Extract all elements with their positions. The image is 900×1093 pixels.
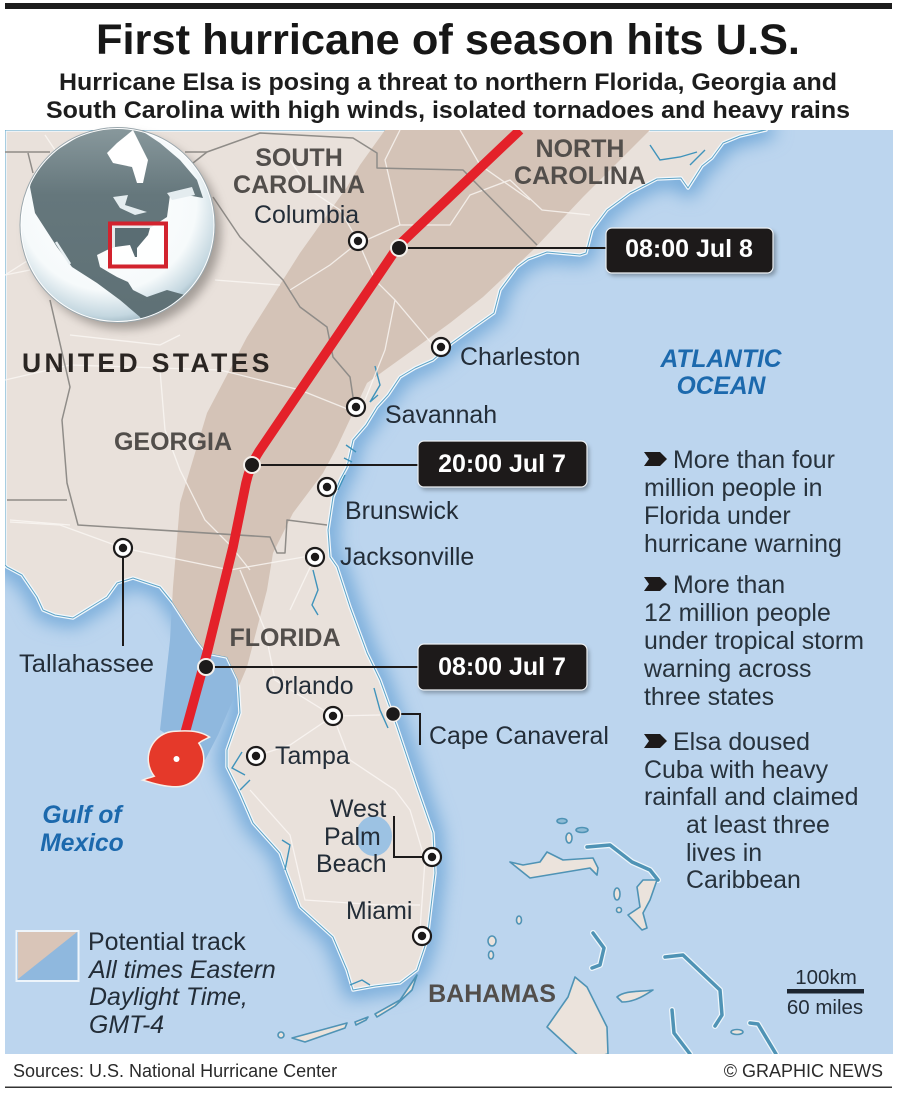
subtitle: Hurricane Elsa is posing a threat to northern Florida, Georgia and <box>59 69 837 96</box>
bullet three: rainfall and claimed <box>644 783 858 811</box>
legend: GMT-4 <box>89 1011 164 1039</box>
bullet three: at least three <box>686 811 830 839</box>
bullet three: Caribbean <box>686 866 801 894</box>
state labels: SOUTH <box>255 144 343 172</box>
bullet two: More than <box>673 571 785 599</box>
Baja detail <box>56 242 70 264</box>
coastal glow <box>5 130 766 990</box>
land <box>5 130 766 990</box>
city labels: Cape Canaveral <box>429 722 609 750</box>
callout: 20:00 Jul 7 <box>418 441 589 490</box>
scale bar: 100km <box>795 966 857 989</box>
callout: 20:00 Jul 7: 20:00 Jul 7 <box>438 450 566 478</box>
callout: 08:00 Jul 7 <box>418 644 589 693</box>
sea labels: Mexico <box>40 830 124 857</box>
bullet two: three states <box>644 683 774 711</box>
bullet three: lives in <box>686 839 762 867</box>
bullet one: hurricane warning <box>644 530 842 558</box>
state labels: CAROLINA <box>233 171 365 199</box>
legend: Potential track <box>88 928 246 956</box>
bullet two: under tropical storm <box>644 627 864 655</box>
city labels: Columbia <box>254 201 359 229</box>
Greenland <box>107 130 148 183</box>
bullet two: warning across <box>643 655 811 683</box>
text block: key facts <box>643 446 864 894</box>
locator box <box>110 224 166 266</box>
Great Lakes <box>113 187 195 215</box>
country label: UNITED STATES <box>22 348 273 378</box>
city labels: Tallahassee <box>19 650 154 678</box>
islands: Bahamas <box>488 818 776 1060</box>
callout: 08:00 Jul 8 <box>606 228 776 276</box>
city labels: Jacksonville <box>340 543 474 571</box>
roads <box>5 130 590 930</box>
city markers <box>114 232 450 945</box>
islands: Florida Keys <box>278 975 417 1042</box>
bullet two <box>643 571 864 711</box>
subtitle <box>46 69 850 124</box>
subtitle: South Carolina with high winds, isolated tornadoes and heavy rains <box>46 97 850 124</box>
icon: hurricane symbol <box>145 732 208 786</box>
bullet one: More than four <box>673 446 835 474</box>
city labels: West <box>330 795 386 823</box>
rivers and lagoons <box>232 145 705 985</box>
footer: © GRAPHIC NEWS <box>724 1061 883 1081</box>
city labels: Brunswick <box>345 497 459 525</box>
city labels <box>19 201 609 925</box>
bullet three: Elsa doused <box>673 728 810 756</box>
city labels: Orlando <box>265 672 354 700</box>
track points and leader lines <box>198 240 606 675</box>
state labels <box>114 135 646 1008</box>
scale bar: 60 miles <box>787 996 863 1019</box>
title: First hurricane of season hits U.S. <box>96 16 800 64</box>
legend: All times Eastern <box>87 956 276 984</box>
city labels: Palm <box>324 823 381 851</box>
storm track <box>185 130 520 733</box>
locator globe <box>20 125 221 329</box>
callout: 08:00 Jul 8: 08:00 Jul 8 <box>625 235 753 263</box>
city labels: Savannah <box>385 401 497 429</box>
state labels: FLORIDA <box>229 624 341 652</box>
scale bar <box>787 969 864 1014</box>
sea labels: OCEAN <box>677 373 767 400</box>
city labels: Beach <box>316 850 387 878</box>
legend: Daylight Time, <box>89 983 248 1011</box>
top rule <box>5 3 892 9</box>
sea labels: Gulf of <box>42 802 124 829</box>
sea labels <box>40 346 783 857</box>
state labels: NORTH <box>536 135 624 163</box>
sea labels: ATLANTIC <box>659 346 783 373</box>
city labels: Charleston <box>460 343 580 371</box>
state labels: CAROLINA <box>514 162 646 190</box>
legend <box>16 928 276 1039</box>
potential track over sea <box>160 618 236 760</box>
callout: 08:00 Jul 7: 08:00 Jul 7 <box>438 653 566 681</box>
bullet three <box>644 728 858 894</box>
footer <box>5 1061 892 1088</box>
city labels: Miami <box>346 897 412 925</box>
Lake Okeechobee <box>356 816 392 856</box>
bullet one: Florida under <box>644 502 791 530</box>
North America <box>30 125 203 325</box>
state labels: GEORGIA <box>114 428 232 456</box>
bullet three: Cuba with heavy <box>644 756 829 784</box>
state borders <box>5 133 537 553</box>
footer: Sources: U.S. National Hurricane Center <box>13 1061 337 1081</box>
potential track over land <box>172 130 650 688</box>
city labels: Tampa <box>275 742 350 770</box>
bullet two: 12 million people <box>644 599 831 627</box>
state labels: BAHAMAS <box>428 980 556 1008</box>
bullet one <box>644 446 842 558</box>
bullet one: million people in <box>644 474 822 502</box>
